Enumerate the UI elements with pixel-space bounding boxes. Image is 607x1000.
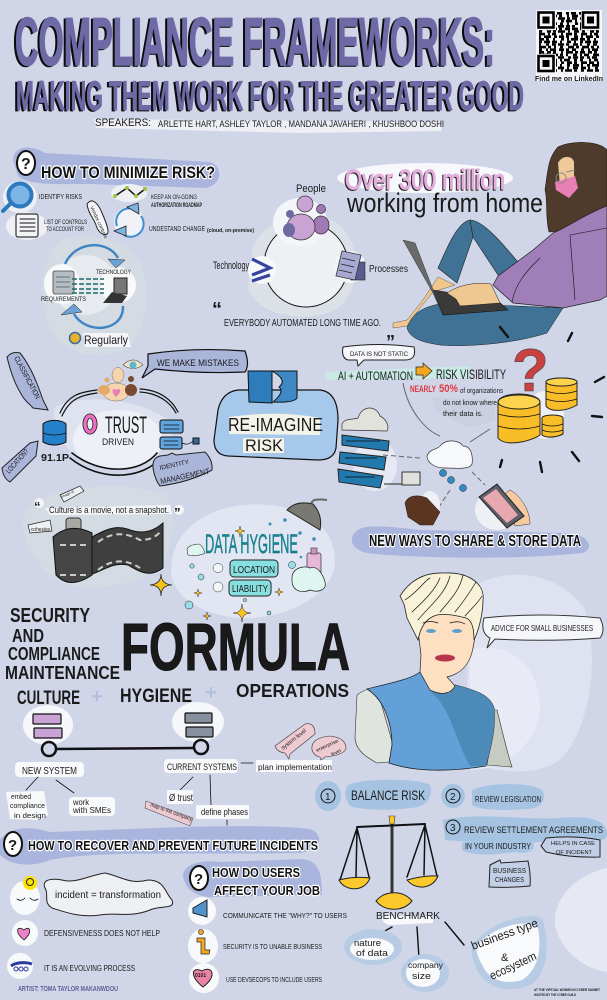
label: plan implementation: plan implementation: [258, 762, 332, 772]
headline: over 300 million: Over 300 million: [345, 164, 505, 195]
illustration: woman with laptop: [393, 142, 607, 346]
statistic: NEARLY: [410, 384, 436, 394]
icon: grey cloud: [342, 408, 388, 431]
icon: current servers: [185, 713, 213, 737]
label: work with smes: work: [72, 798, 90, 807]
icon: balance scale: [339, 816, 438, 909]
icon: closed eyes and lightbulb: [10, 876, 40, 915]
raised shin: [438, 220, 473, 283]
heading: security and compliance maintenance: AND: [12, 626, 44, 646]
callout: advice for small businesses: [483, 615, 603, 648]
icon: database: [41, 420, 69, 464]
icon: trend line: [111, 184, 147, 202]
panel: how to minimize risk: [3, 148, 254, 240]
node: [42, 742, 56, 756]
label: zero trust: [167, 790, 193, 804]
text: devsecops: USE DEVSECOPS TO INCLUDE USERS: [226, 977, 322, 984]
label: embed compliance in design: embed: [11, 792, 31, 801]
heading banner: AFFECT YOUR JOB: [214, 883, 320, 898]
callout: map to the company: map to the company: [149, 802, 193, 823]
callout: classification: CLASSIFICATION: [12, 355, 42, 400]
icon: question mark: ?: [512, 337, 549, 404]
pill: location: LOCATION: [233, 565, 275, 576]
panel: over 300 million: [337, 163, 543, 218]
callout: image of: image of: [61, 490, 75, 499]
panel: advice steps: [315, 780, 607, 997]
callout: cohesive: cohesive: [31, 527, 50, 533]
icon: magnifier: [3, 181, 37, 213]
label: hygiene: HYGIENE: [120, 686, 192, 707]
foot and calf: [393, 277, 455, 328]
heading: security and compliance maintenance: [5, 605, 120, 683]
portrait: woman with blonde hair: [355, 573, 603, 770]
bubble: company size: [401, 954, 449, 992]
dashed link: [383, 455, 485, 510]
mask: [555, 176, 578, 198]
sleeves: [355, 689, 393, 763]
statistic: [410, 383, 503, 428]
heading: formula: FORMULA: [121, 610, 350, 685]
rule: [55, 748, 194, 749]
arrow: top: [65, 245, 118, 264]
neck and face: [418, 608, 475, 693]
text: understand change: [149, 224, 254, 234]
statistic: their data is.: [443, 411, 483, 418]
text: understand change: UNDESTAND CHANGE: [149, 224, 205, 233]
highlights: [229, 414, 320, 453]
callout: business changes: [489, 860, 530, 887]
callout: identity management: IDENTITY: [159, 459, 190, 472]
label: benchmark: BENCHMARK: [376, 911, 440, 922]
QR code: [535, 10, 603, 83]
label: technology: Technology: [213, 260, 249, 272]
callout: location: LOCATION?: [4, 447, 31, 475]
arcs: [60, 389, 178, 416]
icon: greater or equal: [248, 256, 276, 284]
decorative glow: [555, 868, 607, 972]
speakers: SPEAKERS:: [95, 117, 151, 129]
heading banner: HOW DO USERS: [212, 865, 300, 880]
label: current systems: CURRENT SYSTEMS: [167, 762, 237, 773]
icon: checklist: [6, 212, 48, 240]
icon: identity cards: [160, 420, 199, 449]
text: security: SECURITY IS TO UNABLE BUSINESS: [223, 944, 322, 951]
callout: enterprise level: level: [330, 748, 342, 758]
label: regularly: Regularly: [84, 333, 128, 347]
label: operations: OPERATIONS: [236, 681, 349, 701]
title block: [15, 4, 524, 133]
pill: liability: [229, 580, 271, 596]
icon: laptop: [103, 278, 127, 303]
text: list of controls: LIST OF CONTROLS: [44, 219, 87, 226]
callout: incident equals transformation: [44, 873, 173, 916]
bubble: company size: size: [412, 971, 431, 981]
headline: working from home: working from home: [346, 188, 543, 218]
banner: [352, 526, 589, 558]
icon: plug: [384, 483, 402, 485]
icon: white cloud: [427, 441, 472, 468]
heading banner: [0, 826, 319, 865]
callout: data is not static: DATA IS NOT STATIC: [350, 351, 408, 358]
face: [558, 157, 574, 186]
quote: [34, 498, 184, 520]
callout: identity management: MANAGEMENT: [160, 467, 210, 486]
callout: enterprise level: [312, 736, 346, 760]
bubble: business type and ecosystem: ecosystem: [487, 949, 539, 983]
icon: binary heart: 0101: [195, 973, 206, 979]
icon: coin stacks: [498, 378, 577, 443]
step 3: IN YOUR INDUSTRY: [465, 842, 532, 851]
text: ai + automation: AI + AUTOMATION: [338, 369, 413, 383]
lips: [435, 654, 455, 662]
icon: people: [273, 196, 329, 246]
statistic: do not know where: [443, 400, 497, 407]
step 1: BALANCE RISK: [351, 787, 425, 803]
step 3: [443, 816, 607, 854]
bubble: business type and ecosystem: business type: [469, 916, 540, 953]
icon: small foam: [213, 564, 223, 592]
text: roadmap: [151, 194, 202, 209]
connectors: [26, 775, 227, 825]
label: new system: NEW SYSTEM: [22, 766, 77, 777]
icon: processes documents: [334, 251, 366, 283]
panel: data hygiene: [171, 500, 335, 622]
eyes and brows: [423, 622, 465, 624]
quote: “: [34, 499, 40, 514]
text: list of controls: [44, 219, 87, 233]
speakers: ARLETTE HART, ASHLEY TAYLOR , MANDANA JAVAHERI , KHUSHBOO DOSHI: [158, 119, 444, 129]
text: risk: RISK: [245, 436, 284, 455]
icon: foam cloud left: [187, 544, 205, 556]
quote: [212, 299, 395, 352]
heading: security and compliance maintenance: MAINTENANCE: [5, 663, 120, 683]
hair: [400, 573, 483, 640]
laptop base: [433, 290, 508, 315]
label: work with smes: with SMEs: [72, 806, 111, 815]
timeline: new and current systems: [6, 702, 346, 826]
icon: new servers: [33, 714, 62, 738]
rays: [500, 327, 604, 472]
heading: security and compliance maintenance: COMPLIANCE: [8, 644, 100, 664]
callout: helps in case of incident: HELPS IN CASE: [551, 841, 595, 847]
step 2: REVIEW LEGISLATION: [475, 795, 541, 804]
callout: we make mistakes: [142, 350, 248, 378]
text: communicate: COMMUNICATE THE "WHY?" TO USERS: [223, 913, 347, 920]
heading banner: HOW TO MINIMIZE RISK?: [41, 163, 215, 182]
panel: security and compliance formula: [5, 605, 350, 709]
statistic: 50%: [439, 383, 458, 395]
text: understand change: (cloud, on-premise): [207, 228, 254, 234]
icon: change cycle: [114, 203, 144, 237]
label: technology: TECHNOLOGY: [96, 270, 131, 276]
quote: ”: [174, 505, 180, 520]
callout: business changes: BUSINESS: [493, 868, 526, 875]
callout: identity management: [153, 452, 212, 486]
text: roadmap: AUTHORIZATION ROADMAP: [151, 203, 202, 209]
icon: megaphone: [188, 897, 216, 925]
connector arrow: [403, 383, 490, 442]
step 3: 3: [450, 823, 456, 834]
icon: info: [188, 929, 218, 963]
label: embed compliance in design: [6, 791, 48, 820]
quote: EVERYBODY AUTOMATED LONG TIME AGO.: [224, 318, 381, 329]
plug socket: [402, 472, 420, 485]
heading: zero trust driven: DRIVEN: [102, 437, 134, 447]
icon: evolving scribble: [7, 953, 33, 979]
artist credit: ARTIST: TOMA TAYLOR MAKANWDOU: [18, 986, 118, 993]
icon: wrist: [405, 491, 440, 525]
text: identify risks: IDENTIFY RISKS: [39, 194, 82, 201]
arrow: bottom: [74, 306, 123, 328]
highlight: [325, 366, 470, 380]
callout: data is not static: [343, 344, 415, 366]
icon: requirements document: [53, 271, 74, 294]
sweater shade: [430, 685, 494, 766]
icon: phone and hand: [475, 484, 530, 530]
panel: new ways to share and store data: [338, 383, 589, 558]
QR caption: Find me on LinkedIn: [535, 76, 603, 83]
label: processes: Processes: [369, 264, 408, 275]
panel: reimagine risk: [214, 371, 338, 460]
icon: bottle: [307, 548, 321, 581]
label: define phases: [196, 805, 249, 819]
label: people: People: [296, 183, 326, 195]
quote: Culture is a movie, not a snapshot.: [49, 505, 169, 515]
text: re-imagine: RE-IMAGINE: [228, 415, 323, 435]
label: embed compliance in design: in design: [14, 811, 46, 820]
bubble: nature of data: [344, 929, 402, 965]
panel: culture: [23, 486, 184, 596]
pill: liability: LIABILITY: [232, 584, 268, 595]
label: current systems: [164, 759, 238, 773]
label: culture: CULTURE: [17, 688, 80, 709]
callout: system level: system level: [281, 728, 308, 752]
icon: stars: [194, 526, 283, 622]
hands: [447, 283, 500, 306]
callout: image of: [60, 486, 84, 502]
icon: heart: [12, 920, 38, 946]
pill: location: [230, 560, 278, 577]
callout: business changes: CHANGES: [495, 877, 524, 884]
glow behind servers: [353, 439, 397, 491]
panel: how do users affect your job: [183, 859, 347, 993]
heading banner: [183, 859, 322, 898]
label: define phases: define phases: [201, 807, 248, 818]
panel: regular review cycle: [41, 236, 146, 355]
bubble: nature of data: of data: [356, 948, 388, 958]
inner glow: [73, 410, 163, 470]
heading: zero trust driven: [85, 412, 147, 447]
icon: eye: [123, 360, 143, 368]
glasses: [556, 170, 575, 183]
glow: [54, 400, 175, 466]
step 2: 2: [450, 792, 456, 803]
heading banner: ?: [21, 156, 31, 173]
plus: +: [91, 686, 103, 708]
text: list of controls: TO ACCOUNT FOR: [46, 227, 84, 233]
raised thigh: [470, 220, 522, 278]
icon: foam: [292, 567, 325, 592]
quote: “: [212, 299, 222, 321]
panel: how to recover and prevent future incidents: [0, 826, 319, 993]
footer credit: HOSTED BY THE CYBER GUILD: [534, 992, 576, 997]
icon: yellow star: [150, 574, 172, 596]
label: plan implementation: [241, 760, 332, 772]
callout: system level: [275, 724, 315, 759]
icon: puzzle: [248, 371, 297, 403]
callout: cohesive: [28, 520, 52, 533]
cycle outline: [264, 223, 348, 307]
laptop screen: [403, 240, 442, 313]
data dashes: [72, 279, 104, 293]
heading banner: ?: [194, 871, 203, 888]
quote: ”: [386, 332, 395, 352]
glow behind portrait: [465, 575, 592, 772]
heading banner: ?: [8, 837, 17, 854]
heading: zero trust driven: TRUST: [105, 412, 147, 439]
text: risk visibility: RISK VISIBILITY: [436, 366, 506, 382]
speakers: [94, 117, 444, 133]
statistic: of organizations: [460, 388, 503, 395]
network nodes: [440, 470, 466, 492]
hair back: [545, 142, 607, 232]
bubble: nature of data: nature: [354, 938, 381, 948]
connectors: [376, 922, 464, 958]
heading: security and compliance maintenance: SECURITY: [10, 605, 91, 627]
bubble: business type and ecosystem: [469, 916, 547, 989]
panel: people technology processes: [212, 183, 408, 352]
sweater: [367, 672, 494, 770]
heading banner: [13, 148, 219, 188]
label: work with smes: [69, 797, 115, 816]
step 1: 1: [325, 792, 331, 803]
panel: data hygiene: DATA HYGIENE: [205, 529, 298, 559]
plus: +: [205, 682, 217, 704]
callout: enterprise level: enterprise: [315, 738, 340, 754]
heading banner: HOW TO RECOVER AND PREVENT FUTURE INCIDENTS: [28, 838, 318, 853]
callout: incident equals transformation: incident = transformation: [55, 890, 161, 901]
label: zero trust: Ø trust: [169, 793, 193, 804]
text: roadmap: KEEP AN ON-GOING: [151, 194, 197, 201]
icon: database: 91.1P: [41, 453, 69, 464]
lower leg: [407, 303, 563, 346]
icon: binary heart: [189, 963, 219, 993]
portrait glow: [470, 648, 540, 770]
icon: people group: [98, 368, 137, 401]
icon: film canister: [53, 518, 163, 582]
callout: helps in case of incident: OF INCIDENT: [556, 850, 593, 856]
label: requirements: REQUIREMENTS: [41, 297, 86, 303]
bubble: business type and ecosystem: &: [501, 952, 509, 964]
text: evolving: IT IS AN EVOLVING PROCESS: [44, 964, 135, 973]
footer credit: [534, 987, 600, 997]
arrow: orange: [416, 363, 432, 379]
step 2: [441, 784, 544, 810]
callout: vendor control: Vendor controls: [88, 205, 109, 240]
sweater: [493, 206, 607, 308]
icon: servers: [338, 435, 389, 488]
node: [194, 740, 208, 754]
bubbles: [185, 562, 296, 615]
bubble: company size: company: [408, 960, 444, 970]
label: embed compliance in design: compliance: [10, 801, 45, 810]
callout: helps in case of incident: [541, 837, 600, 857]
text: defensiveness: DEFENSIVENESS DOES NOT HELP: [44, 929, 160, 938]
icon: shower head: [268, 500, 327, 558]
panel: risk visibility: [325, 327, 604, 472]
step 1: [315, 780, 431, 811]
panel: zero trust: [2, 350, 248, 486]
label: new system: [15, 762, 84, 777]
callout: we make mistakes: WE MAKE MISTAKES: [157, 358, 239, 368]
